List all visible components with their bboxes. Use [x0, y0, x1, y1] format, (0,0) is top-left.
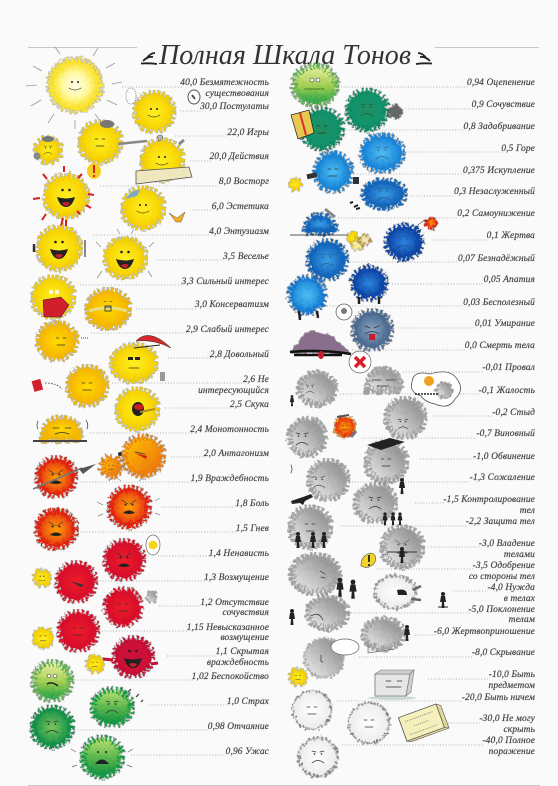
creature 2,8 Contented with umbrella [113, 335, 171, 381]
label 2,6 second line: интересующийся [198, 385, 269, 396]
creature 3,3 Strong interest with red book [34, 278, 72, 317]
creature 4,0 Enthusiasm [34, 228, 85, 268]
creature 0,96 Terror [71, 738, 133, 776]
icon: yellow exclamation bubble [361, 553, 376, 567]
label 2,0: 2,0 Антагонизм [204, 449, 269, 459]
creature 22,0 Games [81, 120, 163, 161]
label 1,1: 1,1 Скрытая [216, 647, 269, 657]
label 0,01: 0,01 Умирание [475, 319, 535, 329]
label 1,15: 1,15 Невысказанное [187, 623, 269, 633]
label 2,8: 2,8 Довольный [210, 349, 269, 360]
title [141, 40, 432, 71]
creature -0,7 Guilt [290, 420, 324, 454]
creature orange accuser [335, 415, 356, 437]
panel: left column creatures (high tones) [26, 47, 200, 776]
creature 3,5 Cheerfulness [96, 229, 154, 278]
creature 0,5 Grief [362, 136, 402, 170]
label 0,07: 0,07 Безнадёжный [458, 253, 535, 264]
creature 1,9 Hostility with spear [33, 459, 96, 495]
icon: left ornament [141, 53, 157, 64]
label -0,7: -0,7 Виновный [476, 428, 535, 439]
label 0,94: 0,94 Оцепенение [467, 78, 535, 88]
label 2,4: 2,4 Монотонность [190, 425, 269, 435]
creature small with hat [34, 136, 59, 161]
silhouette fallen body [291, 494, 313, 505]
label 1,8: 1,8 Боль [235, 499, 269, 509]
label 1,9: 1,9 Враждебность [191, 473, 269, 484]
creature -0,01 Failure [368, 370, 400, 390]
label -1,5 second line: тел [520, 506, 535, 516]
creature 1,8 Pain [97, 478, 160, 526]
panel: right column creatures (low tones) [289, 66, 461, 776]
creature -1,0 Blame with mortarboard [367, 438, 405, 494]
creature 2,4 Monotony [33, 419, 88, 442]
label -20,0: -20,0 Быть ничем [462, 693, 535, 703]
label 0,5: 0,5 Горе [501, 144, 535, 154]
label 20,0: 20,0 Действия [209, 151, 269, 162]
icon: right ornament [416, 53, 432, 64]
creature 0,0 Death of the body [290, 331, 351, 359]
label 1,5: 1,5 Гнев [236, 524, 269, 534]
label -6,0: -6,0 Жертвоприношение [434, 627, 535, 637]
label -40,0: -40,0 Полное [483, 736, 535, 746]
title text: Полная Шкала Тонов [158, 40, 411, 71]
creature -20,0 Being nothing [293, 691, 331, 729]
label 0,2: 0,2 Самоунижение [457, 209, 535, 219]
dotted leaders [72, 87, 502, 755]
creature 40,0 Serenity [26, 47, 122, 129]
label 0,3: 0,3 Незаслуженный [454, 186, 535, 197]
creature 0,98 Despair [33, 708, 71, 746]
creature -4,0 Need for bodies [375, 576, 421, 608]
label 1,2: 1,2 Отсутствие [200, 598, 269, 608]
creature -0,1 Pity [290, 374, 334, 406]
label 3,3: 3,3 Сильный интерес [181, 276, 270, 287]
label -0,2: -0,2 Стыд [492, 407, 535, 418]
creature 0,07 Hopeless [309, 242, 345, 278]
trio of small creatures [348, 233, 370, 250]
label -2,2: -2,2 Защита тел [466, 517, 535, 527]
label -30,0: -30,0 Не могу [479, 714, 536, 724]
label 4,0: 4,0 Энтузиазм [209, 227, 269, 237]
label 40,0 second line: существования [205, 89, 269, 99]
label -1,5: -1,5 Контролирование [443, 495, 535, 505]
label 1,15 second line: возмущение [220, 633, 269, 643]
creature -40,0 Total defeat [299, 738, 337, 776]
creature -10,0 Being an object (box) [368, 670, 416, 700]
label 1,3: 1,3 Возмущение [204, 573, 269, 583]
label 0,0: 0,0 Смерть тела [465, 341, 535, 351]
creature 20,0 Actions with plank [136, 140, 192, 184]
creature -8,0 Concealment [305, 639, 359, 677]
creature 0,05 Apathy [353, 268, 385, 304]
label 0,96: 0,96 Ужас [226, 747, 270, 757]
creature 6,0 Aesthetics with butterfly [124, 189, 185, 227]
creature -6,0 Sacrifice on altar [364, 620, 410, 653]
creature small opponent [102, 458, 120, 476]
label 8,0: 8,0 Восторг [219, 177, 269, 187]
label 0,98: 0,98 Отчаяние [208, 722, 269, 732]
creature -3,5 Approval [292, 556, 357, 599]
creature -2,2 Body protection [291, 508, 329, 548]
panel: left column tone labels [180, 78, 270, 757]
creature -3,0 Body ownership [383, 528, 421, 566]
label -3,0: -3,0 Владение [479, 538, 535, 549]
label -30,0 second line: скрыть [503, 725, 535, 735]
creature 1,5 Anger [37, 511, 75, 547]
creature 1,1 Covert hostility [103, 639, 158, 675]
yellow companion of -8,0 [290, 670, 306, 684]
yellow companion of 0,375 [290, 178, 300, 190]
creature 8,0 Rapture with exclamations [33, 163, 101, 226]
creature 30,0 Postulates [126, 88, 200, 130]
silhouette running body [438, 592, 448, 608]
label 1,0: 1,0 Страх [227, 697, 270, 707]
label 1,4: 1,4 Ненависть [209, 549, 269, 559]
creature 0,2 Self-abasement [290, 209, 348, 235]
creature 3,0 Conservatism [88, 291, 128, 327]
creature 0,9 Sympathy [348, 91, 401, 129]
label 0,1: 0,1 Жертва [487, 231, 535, 241]
creature 0,3 Undeserving [350, 181, 404, 209]
label 3,5: 3,5 Веселье [222, 252, 269, 262]
label -4,0 second line: в телах [504, 594, 536, 604]
icon: red cross bubble [349, 351, 371, 373]
label -3,0 second line: телами [504, 550, 535, 560]
creature 1,15 Unspoken indignation [60, 613, 96, 649]
creature -1,5 Body control [356, 486, 402, 525]
label 2,6: 2,6 Не [243, 375, 269, 385]
creature -1,3 Regret [291, 462, 346, 498]
label -1,0: -1,0 Обвинение [473, 451, 535, 462]
label -8,0: -8,0 Скрывание [472, 648, 535, 658]
yellow companion left of 1,3 [34, 570, 50, 586]
label 0,05: 0,05 Апатия [484, 275, 535, 285]
label 22,0: 22,0 Игры [227, 128, 269, 138]
label -10,0: -10,0 Быть [489, 670, 535, 680]
creature 2,6 Disinterested with red book [32, 368, 105, 404]
creature 1,0 Fear [93, 689, 143, 724]
creature 1,4 Hatred with bubble [106, 535, 160, 578]
yellow companion of 1,1 [88, 656, 102, 672]
creature 2,0 Antagonism [118, 437, 162, 475]
creature 1,2 No sympathy [106, 590, 157, 624]
label 1,1 second line: враждебность [207, 657, 269, 668]
thought cloud -0,1 [411, 372, 461, 406]
creature 0,1 Victim [387, 218, 436, 258]
label -4,0: -4,0 Нужда [487, 582, 535, 593]
creature 0,03 Useless [290, 278, 324, 320]
label 0,375: 0,375 Искупление [463, 166, 535, 176]
creature -30,0 Cannot hide [349, 703, 389, 743]
label 3,0: 3,0 Консерватизм [194, 300, 269, 310]
label 0,03: 0,03 Бесполезный [463, 297, 535, 308]
label 1,02: 1,02 Беспокойство [192, 671, 269, 682]
label -10,0 second line: предметом [488, 680, 535, 691]
label -3,5 second line: со стороны тел [469, 572, 535, 582]
label 40,0: 40,0 Безмятежность [180, 78, 269, 88]
creature 1,3 Indignation [58, 564, 94, 600]
label -3,5: -3,5 Одобрение [473, 560, 535, 571]
label 2,9: 2,9 Слабый интерес [186, 324, 270, 335]
creature 2,9 Mild interest [39, 324, 89, 358]
creature 2,5 Boredom [118, 390, 156, 428]
label -0,1: -0,1 Жалость [479, 386, 535, 396]
label 0,8: 0,8 Задабривание [463, 121, 535, 132]
creature 0,8 Propitiation with gift [291, 110, 341, 148]
label -1,3: -1,3 Сожаление [470, 473, 535, 483]
label -5,0: -5,0 Поклонение [468, 605, 535, 615]
label -40,0 second line: поражение [489, 747, 535, 757]
label 30,0: 30,0 Постулаты [199, 102, 269, 112]
label 6,0: 6,0 Эстетика [212, 202, 269, 212]
panel: right column tone labels [434, 78, 536, 757]
yellow companion of 1,15 [34, 629, 52, 647]
creature 0,01 Dying [336, 304, 390, 348]
creature 0,94 Numbness [294, 66, 336, 104]
icon: cream document [398, 703, 449, 743]
label 2,5: 2,5 Скука [230, 400, 269, 410]
label 1,2 second line: сочувствия [222, 608, 269, 618]
creature 1,02 Anxiety [34, 663, 70, 699]
creature 0,375 Atonement [307, 154, 359, 190]
label -0,01: -0,01 Провал [482, 363, 535, 373]
label -5,0 second line: телам [509, 615, 535, 625]
creature -0,2 Shame [387, 400, 423, 436]
creature -5,0 Body worship [289, 598, 346, 628]
label 0,9: 0,9 Сочувствие [472, 100, 535, 110]
